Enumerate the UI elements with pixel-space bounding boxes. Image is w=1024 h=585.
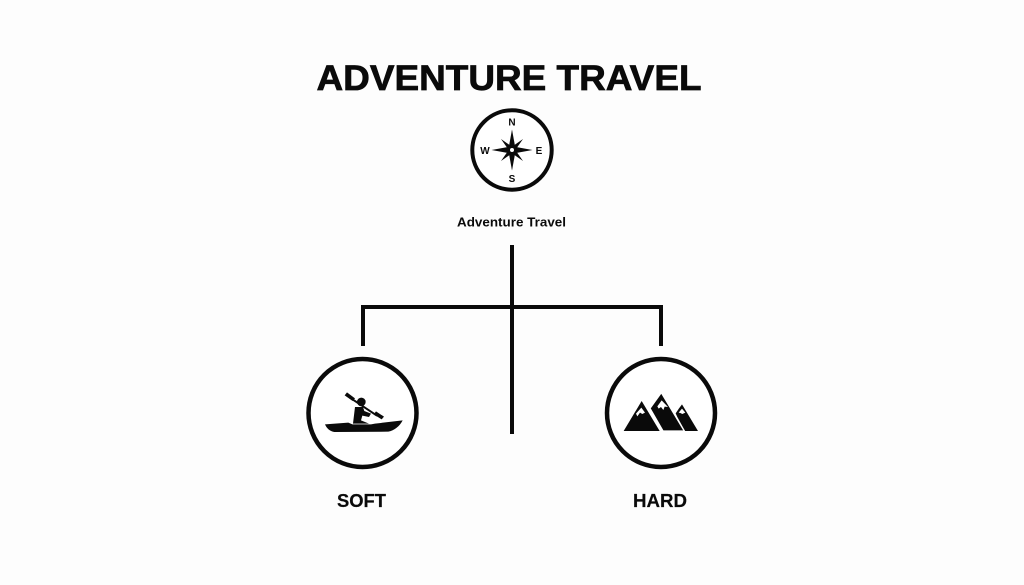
label: soft: SOFT (337, 491, 386, 511)
compass letters: E (536, 146, 543, 157)
kayak hull (325, 420, 403, 432)
compass rose (492, 130, 532, 170)
mountain left (624, 401, 660, 431)
label: hard: HARD (633, 491, 687, 511)
subtitle label: Adventure Travel (457, 214, 566, 230)
kayaker torso (353, 407, 371, 424)
icon: compass (472, 110, 552, 190)
title: ADVENTURE TRAVEL (316, 59, 702, 98)
compass letters: N (508, 118, 516, 128)
mountain centre (650, 393, 684, 431)
compass letters (480, 118, 543, 185)
compass letters: W (480, 146, 490, 157)
mountain right (676, 404, 698, 431)
icon: mountains (607, 359, 715, 467)
tree connector lines (363, 245, 661, 434)
compass letters: S (509, 174, 516, 185)
paddle (350, 398, 377, 416)
icon: kayak (308, 359, 416, 467)
kayaker head (357, 398, 366, 406)
